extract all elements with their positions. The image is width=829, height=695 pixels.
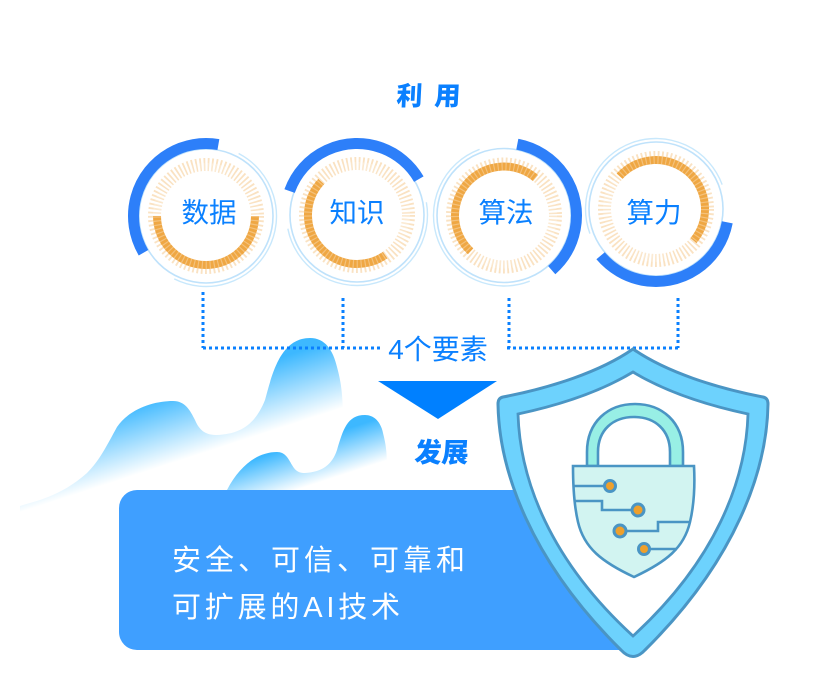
panel: blue box <box>119 490 649 650</box>
lock shackle <box>587 404 683 466</box>
circle: 算力 <box>566 119 746 299</box>
label: 4个要素: 4个要素 <box>388 334 488 365</box>
circle: 算法 <box>413 124 595 307</box>
mountain: small <box>170 415 387 520</box>
heading: 发展: 发展 <box>414 437 470 468</box>
circuit nodes <box>604 480 650 554</box>
shield inner <box>518 372 748 636</box>
circle: 算法: 算法 <box>478 197 534 228</box>
title: 利用: 利用 <box>396 81 473 111</box>
shield outer <box>498 349 768 656</box>
circle: 知识: 知识 <box>330 197 384 228</box>
circle: 知识 <box>265 123 449 307</box>
panel text <box>172 544 469 624</box>
panel text: 安全、可信、可靠和 <box>172 544 469 577</box>
icon: shield with lock <box>498 349 768 656</box>
arrow: down triangle <box>378 381 497 419</box>
panel text: 可扩展的AI技术 <box>172 591 404 624</box>
mountain: large <box>20 338 343 520</box>
circle: 数据 <box>107 117 305 315</box>
connector: dotted lines <box>203 292 678 348</box>
lock body <box>573 466 694 577</box>
circle: 数据: 数据 <box>182 197 236 228</box>
circuit traces <box>574 486 690 549</box>
circle: 算力: 算力 <box>626 197 682 228</box>
